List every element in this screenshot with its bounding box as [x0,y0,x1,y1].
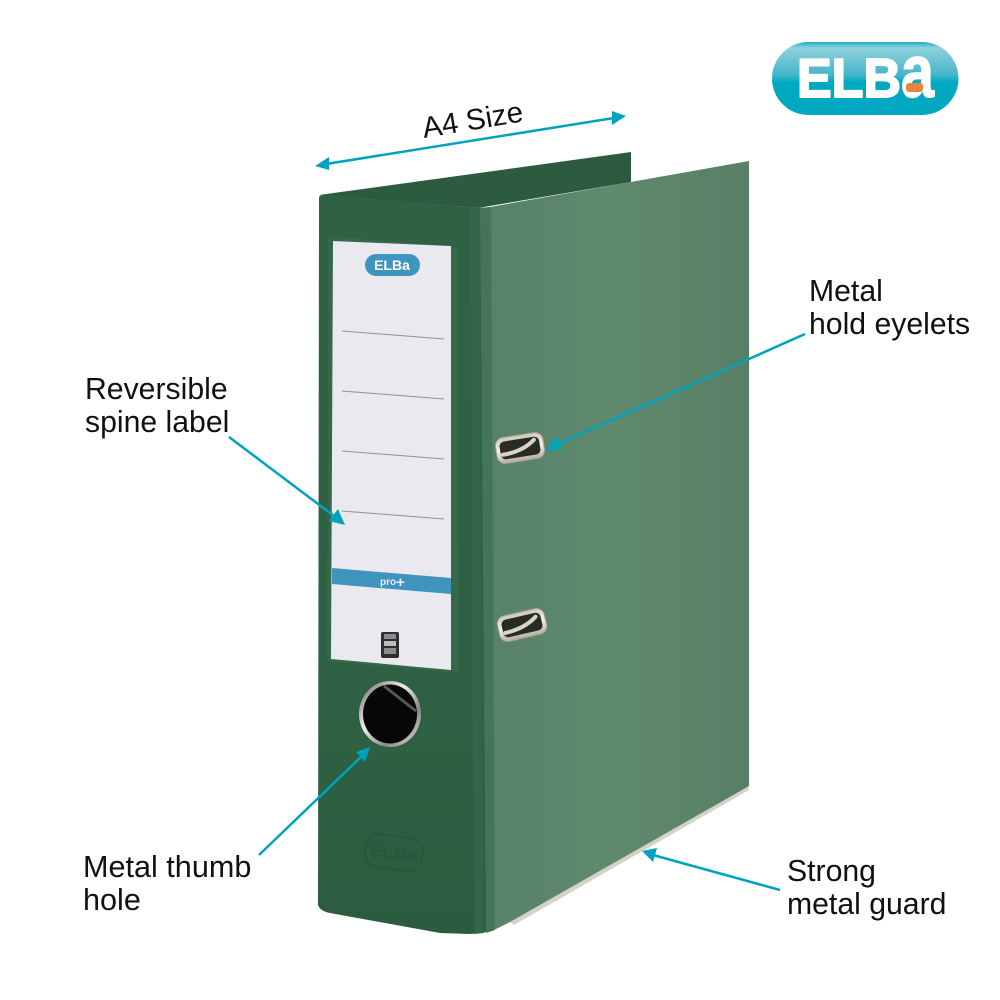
arrow: strong metal guard [642,848,780,890]
label: metal hold eyelets: Metal [809,275,883,308]
embossed logo [363,833,425,872]
label: metal hold eyelets: hold eyelets [809,308,970,341]
label pocket [327,236,458,673]
embossed logo: ELBa [368,840,420,867]
label: strong metal guard: Strong [787,855,876,888]
spine label logo [365,254,420,276]
label: strong metal guard: metal guard [787,888,946,921]
label: metal thumb hole: Metal thumb [83,850,251,884]
spine [318,195,494,934]
label: A4 Size: A4 Size [420,96,525,145]
label writing lines [342,331,444,519]
pro plus band [332,568,451,594]
spine label logo: ELBa [374,257,410,273]
small label badge [381,632,399,658]
label: reversible spine label: Reversible [85,373,228,406]
label: metal thumb hole: hole [83,883,141,917]
logo: Elba: ELB [797,47,901,109]
dimension arrow: A4 size [315,111,626,170]
logo: Elba: a [901,30,935,113]
upper eyelet [494,431,546,465]
front cover [490,161,749,930]
folder [318,152,749,934]
arrow: metal thumb hole [259,747,370,855]
label: reversible spine label: spine label [85,406,229,439]
pro plus band: pro [380,577,396,588]
lower eyelet [496,607,548,643]
spine label [331,241,451,670]
metal guard [510,786,749,925]
metal thumb hole [359,681,421,747]
arrow: reversible spine label [229,437,345,525]
logo: Elba [772,30,958,115]
arrow: metal hold eyelets [546,334,805,451]
spine hinge [470,208,484,934]
back cover [319,152,631,208]
pro plus band: + [396,574,405,591]
